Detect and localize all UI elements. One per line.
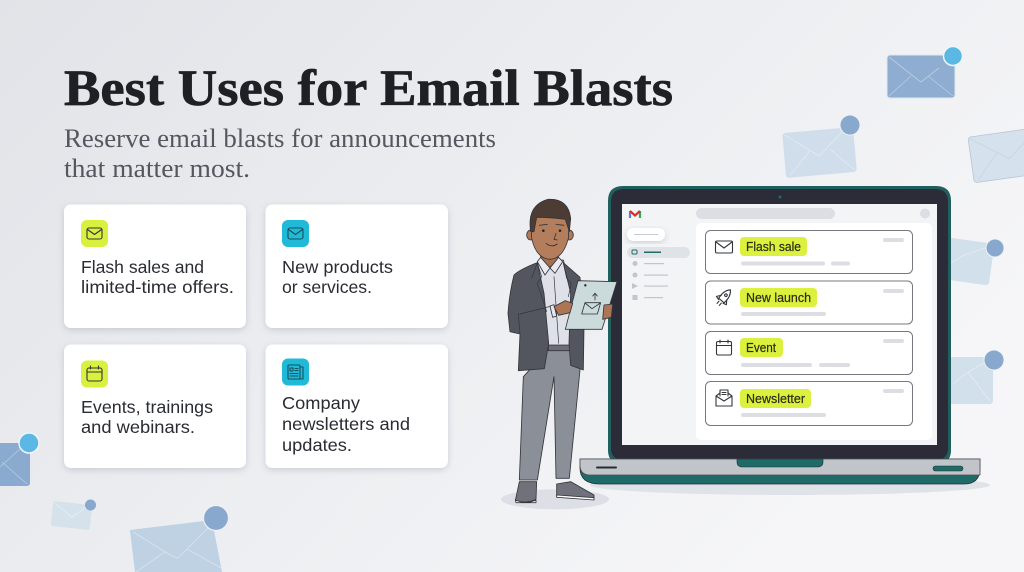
icon: open mail newsletter [716,390,732,406]
card: events [64,344,246,468]
icon: rocket [713,286,735,309]
gmail logo [630,211,640,218]
card text: Flash sales and [81,257,204,277]
jacket [508,263,584,371]
icon: newspaper on cyan [282,358,309,386]
envelope: upper middle pale [782,115,860,178]
card text [81,257,234,297]
icon: calendar [716,340,732,355]
icon: calendar on lime [81,360,108,388]
email list panel [696,223,932,440]
tag: New launch [746,291,811,305]
envelope: left edge blue [0,433,39,486]
tag: Event [746,341,776,355]
card: newsletters [266,344,448,468]
row: newsletter [706,382,912,426]
card: flash sales [64,204,246,328]
laptop shadow [590,475,990,495]
tag: Newsletter [746,392,805,406]
envelope: bottom large [130,506,228,572]
tag [740,338,783,357]
row: new launch [706,281,912,324]
card text: or services. [282,277,372,297]
card text: updates. [282,435,352,455]
neck and head [527,199,573,275]
avatar dot [920,208,930,218]
tag [740,288,817,307]
envelope: top right blue [887,46,962,98]
laptop lid [608,186,951,462]
shirt [537,260,571,345]
tag [740,237,807,256]
laptop [580,186,990,495]
tablet [565,281,617,329]
envelope: behind laptop lower [935,350,1004,404]
subtitle [64,124,496,183]
envelope: right edge pale [968,128,1024,183]
trousers [519,349,580,480]
belt [548,345,570,351]
shirt cuff [550,305,557,317]
tag: Flash sale [746,240,801,254]
envelope: behind laptop upper [927,235,1004,286]
ground shadow [501,489,609,509]
subtitle: Reserve email blasts for announcements [64,124,496,153]
tag [740,389,811,408]
icon: envelope on lime [81,220,108,247]
card text: limited-time offers. [81,277,234,297]
icon: mail [716,241,732,253]
card text [282,257,393,297]
sidebar [627,211,690,300]
card text [282,393,410,455]
person holding tablet [501,199,617,509]
search bar [696,208,835,219]
card text: and webinars. [81,417,195,437]
row: flash sale [706,230,912,274]
laptop base [580,459,980,484]
card: new products [266,204,448,328]
hands [554,301,573,315]
card text: Company [282,393,360,413]
card text: Events, trainings [81,397,213,417]
subtitle: that matter most. [64,154,250,183]
envelope: small lower left [51,500,96,530]
title: Best Uses for Email Blasts [64,61,673,117]
icon: envelope on cyan [282,220,309,247]
row: event [706,332,912,374]
card text: New products [282,257,393,277]
card text: newsletters and [282,414,410,434]
shoes [515,482,594,503]
card text [81,397,213,437]
